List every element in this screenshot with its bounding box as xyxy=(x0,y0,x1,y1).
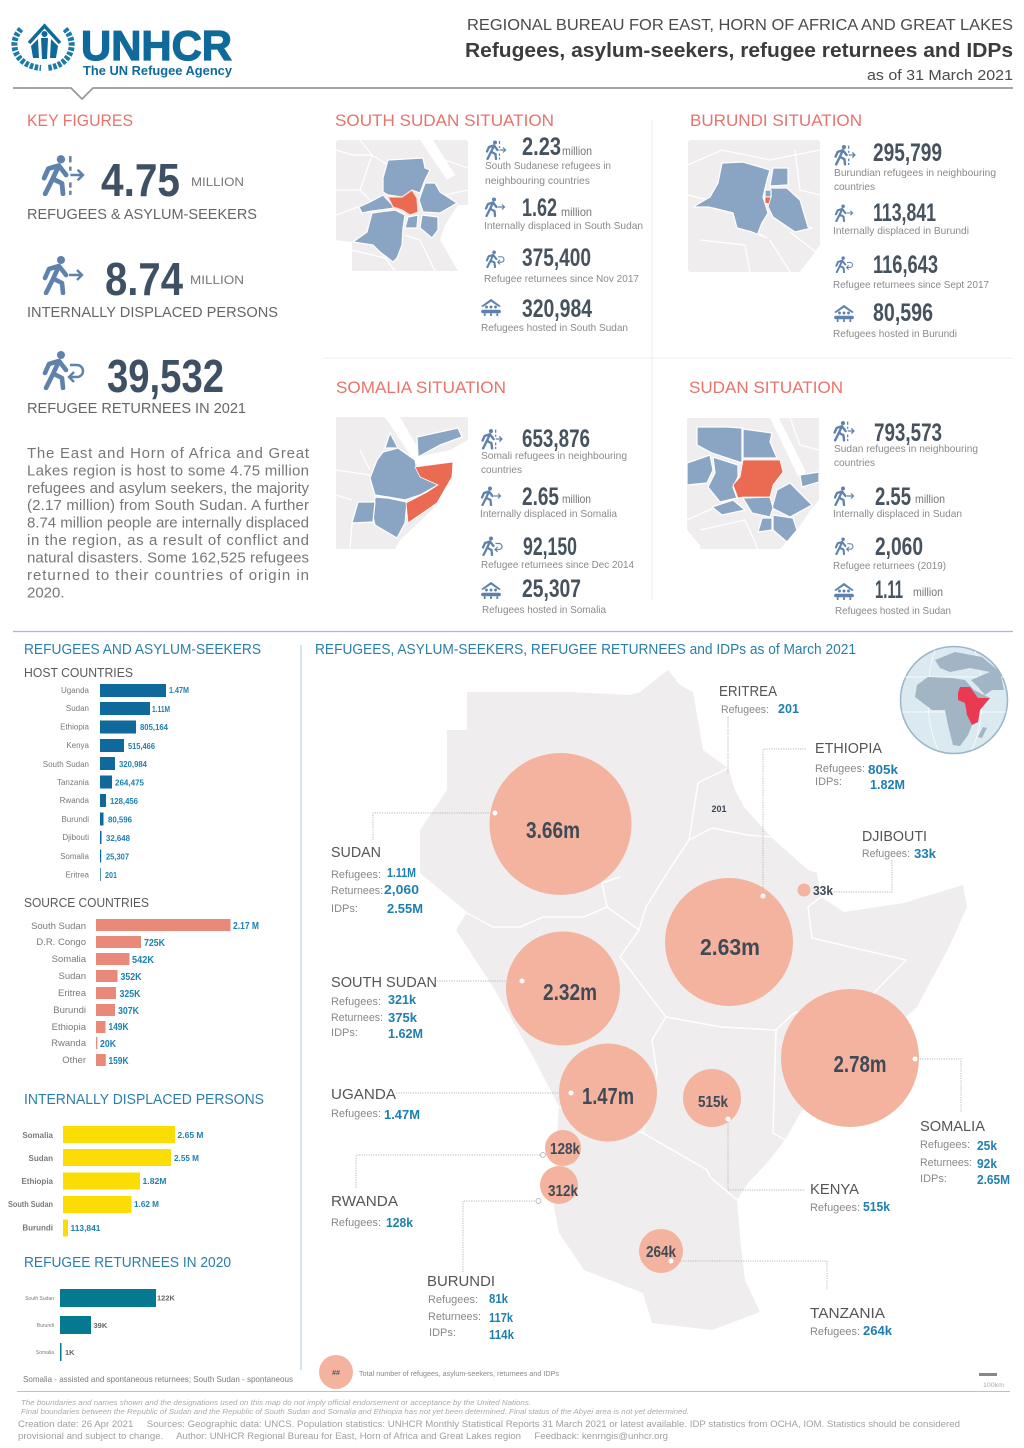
bar chart: host countries: 805,164 xyxy=(140,722,168,732)
figure: 2.55 xyxy=(875,483,911,511)
bar chart: source countries: 149K xyxy=(108,1022,129,1033)
heading: SOMALIA SITUATION xyxy=(336,378,506,397)
unit: MILLION xyxy=(190,273,244,287)
caption: Refugee returnees since Sept 2017 xyxy=(833,279,989,291)
bar chart: IDPs: South Sudan xyxy=(8,1200,53,1209)
bar chart: IDPs: 2.65 M xyxy=(178,1130,204,1140)
label: Somalia: IDPs: xyxy=(920,1173,947,1185)
label: Eritrea: ERITREA xyxy=(719,683,777,700)
bar chart: IDPs: 113,841 xyxy=(70,1223,101,1233)
bubble: Rwanda xyxy=(540,1130,581,1166)
caption: Internally displaced in Burundi xyxy=(833,225,969,237)
caption: Refugees hosted in Sudan xyxy=(835,605,951,617)
icon: hosted xyxy=(481,582,501,599)
bubble: Somalia: 2.78m xyxy=(834,1051,886,1077)
label: Somalia: Refugees: xyxy=(920,1139,970,1151)
bar chart: source countries: 2.17 M xyxy=(233,921,259,932)
bar chart: IDPs: 1.62 M xyxy=(134,1199,159,1209)
date: as of 31 March 2021 xyxy=(867,67,1013,84)
bar chart: source countries: Other xyxy=(62,1055,86,1066)
caption: INTERNALLY DISPLACED PERSONS xyxy=(27,305,278,321)
figure: returnees: 39,532 xyxy=(107,350,224,402)
bar chart: source countries: 542K xyxy=(132,955,155,966)
map: Sudan xyxy=(687,418,819,549)
label: Sudan: 1.11M xyxy=(387,865,416,880)
caption: REFUGEES & ASYLUM-SEEKERS xyxy=(27,207,257,223)
bubble: South Sudan: 2.32m xyxy=(543,979,597,1005)
icon: IDP xyxy=(836,204,853,221)
label: Djibouti: Refugees: xyxy=(862,848,910,860)
leader lines xyxy=(356,717,961,1290)
bar chart: source countries: 352K xyxy=(120,972,142,983)
caption: Refugees hosted in South Sudan xyxy=(481,322,628,334)
bar chart: host countries: 80,596 xyxy=(108,814,132,824)
bar chart: returnees: Burundi xyxy=(37,1323,54,1329)
bar chart: source countries: 159K xyxy=(108,1056,129,1067)
bubble: Burundi xyxy=(536,1166,578,1204)
unit: million xyxy=(561,205,592,219)
bar chart: source countries: South Sudan xyxy=(31,921,86,932)
label: Sudan: 2,060 xyxy=(384,882,419,897)
caption: Refugee returnees (2019) xyxy=(833,560,946,572)
label: Sudan: SUDAN xyxy=(331,844,381,861)
bubble: Ethiopia: 2.63m xyxy=(700,934,760,960)
bubbles: totals by country xyxy=(490,753,919,1273)
bar chart: source countries: D.R. Congo xyxy=(36,937,86,948)
label: South Sudan: 1.62M xyxy=(388,1026,423,1041)
text block: summary: (2.17 million) from South Sudan. A further xyxy=(27,497,309,514)
bar chart: source countries: Ethiopia xyxy=(52,1022,87,1033)
label: Ethiopia: IDPs: xyxy=(815,776,842,788)
label: Burundi: IDPs: xyxy=(429,1327,456,1339)
bar chart: host countries: 1.11M xyxy=(152,704,170,714)
label: Eritrea xyxy=(719,683,799,716)
label: Djibouti xyxy=(862,828,937,861)
panel: Sudan situation xyxy=(687,378,978,617)
map: Burundi xyxy=(688,140,820,272)
label: Rwanda: RWANDA xyxy=(331,1193,398,1210)
label: South Sudan: SOUTH SUDAN xyxy=(331,974,437,991)
bar chart: host countries: Djibouti xyxy=(62,833,89,842)
bar chart: source countries: 307K xyxy=(118,1006,140,1017)
tagline: The UN Refugee Agency xyxy=(83,63,233,78)
bar chart: source countries: Eritrea xyxy=(58,988,87,999)
label: Sudan: IDPs: xyxy=(331,903,358,915)
heading: refugees and asylum-seekers: REFUGEES AND ASYLUM-SEEKERS xyxy=(24,641,261,658)
icon: hosted xyxy=(834,305,854,322)
figure: 1.62 xyxy=(522,194,557,222)
label: Kenya: KENYA xyxy=(810,1181,859,1198)
text block: summary: refugees and asylum seekers, the majority xyxy=(27,480,310,497)
caption: Internally displaced in Sudan xyxy=(833,508,962,520)
unit: million xyxy=(915,492,945,506)
bar chart: host countries: Ethiopia xyxy=(60,722,90,732)
label: Kenya: 515k xyxy=(863,1199,891,1214)
caption: countries xyxy=(481,464,522,476)
sub-heading: source countries: SOURCE COUNTRIES xyxy=(24,896,149,910)
label: Tanzania: 264k xyxy=(863,1323,893,1338)
footer: disclaimer and sources: Final boundaries between the Republic of Sudan and the Republic of South Sudan and Somalia and Ethiopia has not yet been determined. Final status of the Abyei area is not yet determined. xyxy=(21,1407,689,1416)
label: Ethiopia xyxy=(815,740,905,792)
unit: million xyxy=(562,492,591,506)
bar chart: host countries: 201 xyxy=(105,870,117,880)
caption: countries xyxy=(834,457,875,469)
label: Somalia: 25k xyxy=(977,1138,998,1153)
label: Djibouti: 33k xyxy=(914,846,937,861)
text block: summary xyxy=(27,445,310,602)
text block: summary: 2020. xyxy=(27,584,65,602)
bar chart: host countries: Kenya xyxy=(66,741,90,750)
figure: 295,799 xyxy=(873,139,942,167)
icon: returnee xyxy=(487,250,504,267)
text block: summary: natural disasters. Some 162,525 refugees xyxy=(27,550,309,566)
text block: summary: in the region, as a result of conflict and xyxy=(27,532,309,549)
bar chart: host countries: 1.47M xyxy=(169,685,189,695)
label: Burundi: BURUNDI xyxy=(427,1273,495,1290)
icon: returnee xyxy=(836,256,852,272)
bubble: Sudan: 3.66m xyxy=(526,817,580,843)
heading: SUDAN SITUATION xyxy=(689,378,843,397)
label: Kenya: Refugees: xyxy=(810,1202,860,1214)
bar chart: host countries: Eritrea xyxy=(65,870,90,880)
inset: globe xyxy=(900,646,1008,754)
bar chart: host countries: Sudan xyxy=(66,704,89,713)
label: Tanzania: TANZANIA xyxy=(810,1305,885,1322)
label: Burundi: Returnees: xyxy=(428,1311,481,1323)
footer: disclaimer and sources: The boundaries and names shown and the designations used on this map do not imply official endorsement or acceptance by the United Nations. xyxy=(21,1398,531,1407)
caption: Sudan refugees in neighbouring xyxy=(834,443,978,455)
figure: 92,150 xyxy=(523,533,577,561)
bar chart: IDPs: Sudan xyxy=(29,1154,53,1163)
bubble: Ethiopia xyxy=(665,878,793,1006)
legend: bubble: Total number of refugees, asylum-seekers, returnees and IDPs xyxy=(359,1371,560,1378)
icon: hosted xyxy=(481,299,501,316)
caption: Somali refugees in neighbouring xyxy=(481,450,627,462)
label: Uganda xyxy=(331,1086,420,1122)
label: South Sudan: 375k xyxy=(388,1010,418,1025)
bar chart: host countries: 25,307 xyxy=(106,852,129,862)
figure: 375,400 xyxy=(522,244,591,272)
sub-heading: host countries: HOST COUNTRIES xyxy=(24,666,133,680)
caption: neighbouring countries xyxy=(485,175,590,187)
label: Uganda: Refugees: xyxy=(331,1108,381,1120)
bar chart: source countries: 20K xyxy=(100,1039,117,1050)
note: returnees: Somalia - assisted and spontaneous returnees; South Sudan - spontaneous xyxy=(23,1374,293,1384)
icon: returnee xyxy=(45,351,83,388)
label: Sudan: Refugees: xyxy=(331,869,381,881)
bar chart: returnees: 122K xyxy=(157,1294,176,1302)
figure: IDPs: 8.74 xyxy=(105,253,183,305)
footer: disclaimer and sources xyxy=(18,1398,960,1441)
text block: summary: 8.74 million people are internally displaced xyxy=(27,514,309,532)
label: Djibouti: DJIBOUTI xyxy=(862,828,927,845)
bar chart: source countries: Somalia xyxy=(52,954,87,965)
label: Somalia: 2.65M xyxy=(977,1172,1010,1187)
figure: 2.65 xyxy=(522,483,559,511)
icon: refugee xyxy=(483,429,502,449)
caption: Refugees hosted in Somalia xyxy=(482,604,606,616)
bubble: Kenya xyxy=(683,1069,741,1127)
bar chart: host countries: South Sudan xyxy=(43,760,89,769)
heading: main map: REFUGEES, ASYLUM-SEEKERS, REFUGEE RETURNEES and IDPs as of March 2021 xyxy=(315,641,856,658)
label: Somalia xyxy=(920,1118,1010,1187)
label: Ethiopia: 1.82M xyxy=(870,777,905,792)
figure: refugees: 4.75 xyxy=(101,154,180,206)
bar chart: returnees: 1K xyxy=(65,1348,75,1357)
caption: REFUGEE RETURNEES IN 2021 xyxy=(27,401,246,417)
figure: 1.11 xyxy=(875,576,903,604)
icon: refugee xyxy=(836,145,855,165)
figure: 116,643 xyxy=(873,251,938,279)
bar chart: returnees xyxy=(25,1289,176,1361)
caption: Internally displaced in South Sudan xyxy=(484,220,643,232)
label: Rwanda: Refugees: xyxy=(331,1217,381,1229)
bar chart: host countries: Tanzania xyxy=(57,778,90,787)
caption: Refugee returnees since Dec 2014 xyxy=(481,559,634,571)
caption: Internally displaced in Somalia xyxy=(480,508,617,520)
legend: bubble xyxy=(319,1355,560,1389)
heading: IDPs: INTERNALLY DISPLACED PERSONS xyxy=(24,1091,264,1108)
bar chart: host countries: Rwanda xyxy=(60,796,90,805)
footer: disclaimer and sources: Creation date: 26 Apr 2021 Sources: Geographic data: UNCS. Population statistics: UNHCR Monthly Statistical Reports 31 March 2021 or latest available. IDP statistics from OCHA, IOM. Statistics should be considered xyxy=(18,1419,960,1429)
bar chart: host countries: Somalia xyxy=(60,852,90,861)
heading: KEY FIGURES xyxy=(27,111,133,130)
panel: Somalia situation xyxy=(336,378,634,616)
label: Tanzania: Refugees: xyxy=(810,1326,860,1338)
bubble: Rwanda: 128k xyxy=(550,1141,580,1158)
label: Rwanda: 128k xyxy=(386,1215,414,1230)
bar chart: source countries: 325K xyxy=(120,989,141,1000)
panel: key figures xyxy=(27,111,278,417)
icon: IDP xyxy=(45,256,82,293)
bar chart: host countries: 128,456 xyxy=(110,796,138,806)
bubble: Sudan xyxy=(490,753,632,895)
bar chart: IDPs: 1.82M xyxy=(142,1176,166,1186)
label: South Sudan: Returnees: xyxy=(331,1012,383,1024)
label: Ethiopia: Refugees: xyxy=(815,763,865,775)
header titles xyxy=(465,17,1013,84)
bar chart: IDPs: Burundi xyxy=(22,1224,53,1232)
bar chart: source countries: 725K xyxy=(144,938,166,949)
legend: bubble: ## xyxy=(332,1370,340,1377)
logo: UNHCR xyxy=(14,22,233,78)
label: Burundi: 81k xyxy=(489,1291,509,1306)
label: Kenya xyxy=(810,1181,891,1214)
label: Burundi: Refugees: xyxy=(428,1294,478,1306)
bubble: Tanzania xyxy=(639,1229,683,1273)
bubble: Uganda xyxy=(559,1044,657,1142)
caption: Burundian refugees in neighbouring xyxy=(834,167,996,179)
label: Ethiopia: 805k xyxy=(868,762,899,777)
figure: 113,841 xyxy=(873,199,936,227)
bar chart: host countries xyxy=(43,684,189,881)
bubble: Tanzania: 264k xyxy=(646,1244,676,1261)
label: Burundi xyxy=(427,1273,515,1342)
unit: million xyxy=(913,585,943,599)
wordmark: UNHCR xyxy=(81,22,232,69)
text block: summary: returned to their countries of origin in xyxy=(27,567,309,584)
icon: IDP xyxy=(486,198,504,216)
heading: BURUNDI SITUATION xyxy=(690,111,862,130)
bar chart: IDPs: 2.55 M xyxy=(174,1153,199,1163)
caption: countries xyxy=(834,181,875,193)
bar chart: host countries: Burundi xyxy=(61,815,89,824)
icon: refugee xyxy=(487,140,506,160)
unit: million xyxy=(562,144,592,158)
footer: disclaimer and sources: provisional and subject to change. Author: UNHCR Regional Bureau for East, Horn of Africa and Great Lakes region Feedback: kenrngis@unhcr.org xyxy=(18,1431,668,1441)
value: Eritrea: 201 xyxy=(711,804,727,814)
bar chart: source countries xyxy=(31,919,259,1067)
bar chart: IDPs: Ethiopia xyxy=(21,1177,54,1186)
map: region countries xyxy=(420,670,967,1330)
bubble: Uganda: 1.47m xyxy=(582,1083,634,1109)
icon: returnee xyxy=(483,536,502,555)
label: South Sudan: Refugees: xyxy=(331,996,381,1008)
scale bar: 100km xyxy=(983,1383,1004,1389)
bubble: Djibouti xyxy=(798,883,834,898)
bar chart: source countries: Sudan xyxy=(59,971,86,982)
bar chart: host countries: 320,984 xyxy=(119,759,147,769)
label: Ethiopia: ETHIOPIA xyxy=(815,740,882,757)
map: South Sudan xyxy=(335,140,468,272)
label: Rwanda xyxy=(331,1193,414,1230)
icon: IDP xyxy=(835,486,854,505)
label: Uganda: 1.47M xyxy=(384,1107,420,1122)
bar chart: source countries: Burundi xyxy=(53,1005,86,1016)
unit: MILLION xyxy=(191,175,244,189)
icon: hosted xyxy=(834,583,854,600)
bubble: Somalia xyxy=(781,989,919,1127)
label: Somalia: Returnees: xyxy=(920,1157,972,1169)
caption: Refugees hosted in Burundi xyxy=(833,328,957,340)
label: Tanzania xyxy=(810,1305,893,1338)
bar chart: host countries: 32,648 xyxy=(106,833,130,843)
label: Uganda: UGANDA xyxy=(331,1086,396,1103)
text block: summary: Lakes region is host to some 4.75 million xyxy=(27,462,309,480)
label: Sudan: 2.55M xyxy=(387,901,423,916)
label: Eritrea: 201 xyxy=(778,701,799,716)
figure: 80,596 xyxy=(873,299,933,327)
panel: South Sudan situation xyxy=(335,111,643,334)
label: Burundi: 117k xyxy=(489,1310,514,1325)
label: South Sudan: 321k xyxy=(388,992,417,1007)
icon: refugee xyxy=(44,155,83,195)
figure: 25,307 xyxy=(522,575,581,603)
bar chart: source countries: Rwanda xyxy=(51,1038,87,1049)
text block: summary: The East and Horn of Africa and Great xyxy=(27,445,310,462)
icon: IDP xyxy=(482,486,500,505)
figure: 2.23 xyxy=(522,133,561,161)
figure: 793,573 xyxy=(874,419,942,447)
label: Somalia: 92k xyxy=(977,1156,998,1171)
icon: refugee xyxy=(835,421,854,441)
bubble: South Sudan xyxy=(506,932,620,1046)
label: South Sudan: IDPs: xyxy=(331,1027,358,1039)
bubble: Djibouti: 33k xyxy=(813,883,834,898)
bar chart: IDPs: Somalia xyxy=(22,1131,54,1140)
scale bar xyxy=(979,1373,1004,1389)
icon: UNHCR wreath emblem xyxy=(14,26,72,68)
bar chart: returnees: South Sudan xyxy=(25,1296,54,1302)
panel: Burundi situation xyxy=(688,111,996,340)
heading: SOUTH SUDAN SITUATION xyxy=(335,111,554,130)
bar chart: returnees: Somalia xyxy=(36,1350,54,1356)
heading: refugee returnees: REFUGEE RETURNEES IN 2020 xyxy=(24,1254,231,1271)
map: Somalia xyxy=(336,417,468,549)
figure: 653,876 xyxy=(522,425,590,453)
label: Somalia: SOMALIA xyxy=(920,1118,985,1135)
caption: South Sudanese refugees in xyxy=(485,160,611,172)
bar chart: IDPs xyxy=(8,1126,204,1236)
figure: 2,060 xyxy=(875,533,923,561)
bureau line: REGIONAL BUREAU FOR EAST, HORN OF AFRICA AND GREAT LAKES xyxy=(467,17,1013,34)
bar chart: returnees: 39K xyxy=(94,1321,108,1330)
main title: Refugees, asylum-seekers, refugee returnees and IDPs xyxy=(465,40,1013,62)
figure: 320,984 xyxy=(522,295,592,323)
bar chart: host countries: Uganda xyxy=(61,686,90,695)
bar chart: host countries: 264,475 xyxy=(115,778,144,788)
caption: Refugee returnees since Nov 2017 xyxy=(484,273,639,285)
bar chart: host countries: 515,466 xyxy=(128,741,155,751)
bubble: Kenya: 515k xyxy=(698,1094,728,1111)
label: Sudan xyxy=(331,844,423,916)
label: South Sudan xyxy=(331,974,437,1041)
label: Burundi: 114k xyxy=(489,1327,515,1342)
label: Eritrea: Refugees: xyxy=(721,704,769,716)
label: Sudan: Returnees: xyxy=(331,885,383,897)
bubble: Burundi: 312k xyxy=(548,1183,578,1200)
icon: returnee xyxy=(836,537,853,554)
